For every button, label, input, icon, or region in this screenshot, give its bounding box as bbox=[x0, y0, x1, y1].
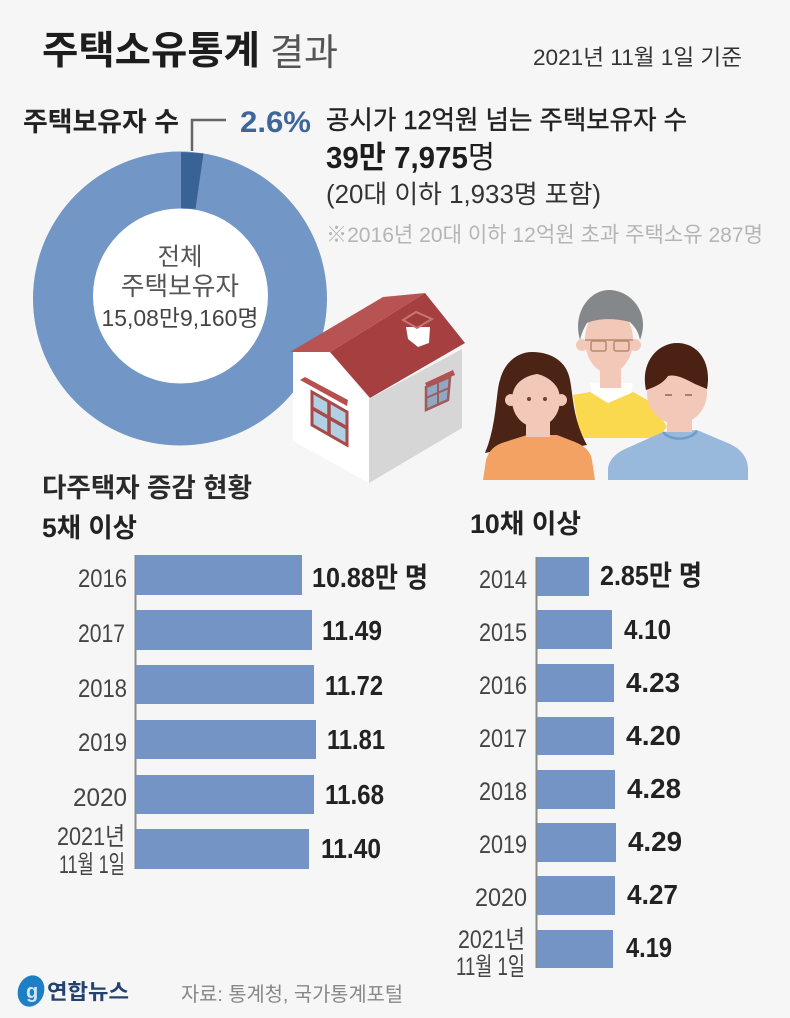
bar chart: 5채 이상: 2019 bbox=[78, 729, 127, 757]
summary text: 39만 7,975명 bbox=[326, 140, 495, 175]
source: 자료: 통계청, 국가통계포털 bbox=[181, 984, 403, 1006]
bar chart: 5채 이상: 11.72 bbox=[325, 670, 383, 701]
bar chart: 5채 이상: 11.68 bbox=[325, 779, 384, 810]
bar chart: 10채 이상: 4.19 bbox=[626, 932, 672, 963]
bar chart: 10채 이상: 2020 bbox=[475, 884, 527, 912]
summary text: (20대 이하 1,933명 포함) bbox=[326, 180, 601, 209]
reference date: 2021년 11월 1일 기준 bbox=[533, 45, 742, 70]
bar chart: 5채 이상: 11월 1일 bbox=[59, 851, 125, 879]
donut chart bbox=[33, 152, 327, 446]
bar chart: 10채 이상: 2017 bbox=[479, 725, 527, 753]
title: 결과 bbox=[270, 32, 338, 73]
bar chart: 5채 이상: 2016 bbox=[78, 565, 127, 593]
icon: people bbox=[483, 290, 748, 480]
donut centre text: 전체 bbox=[157, 243, 203, 271]
bar chart: 10채 이상: 4.28 bbox=[627, 773, 681, 804]
bar chart: 10채 이상: 2018 bbox=[479, 778, 527, 806]
donut centre text bbox=[102, 243, 258, 331]
bar chart: 10채 이상: 2014 bbox=[479, 566, 527, 594]
bar chart: 10채 이상: 4.20 bbox=[626, 720, 681, 751]
summary text: 공시가 12억원 넘는 주택보유자 수 bbox=[326, 105, 687, 135]
bar chart: 10채 이상: 4.10 bbox=[624, 614, 671, 645]
logo: Yonhap News bbox=[13, 972, 129, 1010]
bar chart: 5채 이상: 11.49 bbox=[322, 615, 382, 646]
bar chart: 10채 이상: 2019 bbox=[479, 831, 527, 859]
bar chart: 5채 이상: 10.88만 명 bbox=[312, 562, 428, 593]
chart heading: 10채 이상 bbox=[470, 509, 581, 539]
bar chart: 10채 이상: 2.85만 명 bbox=[600, 560, 702, 591]
bar chart: 5채 이상: 2021년 bbox=[57, 823, 125, 851]
donut heading: 주택보유자 수 bbox=[23, 107, 179, 137]
bar chart: 5채 이상: 2017 bbox=[78, 620, 125, 648]
bar chart: 10채 이상: 2016 bbox=[479, 672, 527, 700]
donut slice: 2.6% bbox=[181, 152, 204, 209]
title: 주택소유통계 bbox=[42, 30, 260, 73]
bar chart: 5채 이상: 11.40 bbox=[321, 833, 381, 864]
donut centre text: 15,08만9,160명 bbox=[102, 305, 258, 331]
bar chart: 10채 이상: 4.27 bbox=[627, 879, 678, 910]
bar chart: 5채 이상: 11.81 bbox=[327, 724, 385, 755]
bar chart: 10채 이상: 4.29 bbox=[628, 826, 682, 857]
bar chart: 5채 이상 bbox=[42, 513, 428, 879]
bar chart: 10채 이상: 11월 1일 bbox=[456, 953, 525, 981]
donut centre text: 주택보유자 bbox=[121, 272, 239, 301]
section heading: 다주택자 증감 현황 bbox=[42, 473, 252, 503]
icon: house bbox=[290, 293, 465, 483]
bar chart: 10채 이상 bbox=[456, 509, 702, 981]
grandparent bbox=[573, 290, 667, 438]
icon: logo mark: g bbox=[26, 981, 38, 1003]
bar chart: 5채 이상: 2020 bbox=[73, 784, 127, 812]
bar chart: 10채 이상: 4.23 bbox=[626, 667, 680, 698]
donut callout line bbox=[192, 120, 226, 151]
bar chart: 10채 이상: 2015 bbox=[479, 619, 527, 647]
woman bbox=[483, 352, 595, 480]
chart heading: 5채 이상 bbox=[42, 513, 137, 543]
bar chart: 5채 이상: 2018 bbox=[78, 675, 127, 703]
logo: Yonhap News: 연합뉴스 bbox=[47, 981, 129, 1004]
summary text bbox=[326, 105, 763, 247]
bar chart: 10채 이상: 2021년 bbox=[458, 926, 525, 954]
summary text: ※2016년 20대 이하 12억원 초과 주택소유 287명 bbox=[326, 223, 763, 247]
man bbox=[608, 343, 748, 480]
donut percent: 2.6% bbox=[240, 106, 311, 139]
